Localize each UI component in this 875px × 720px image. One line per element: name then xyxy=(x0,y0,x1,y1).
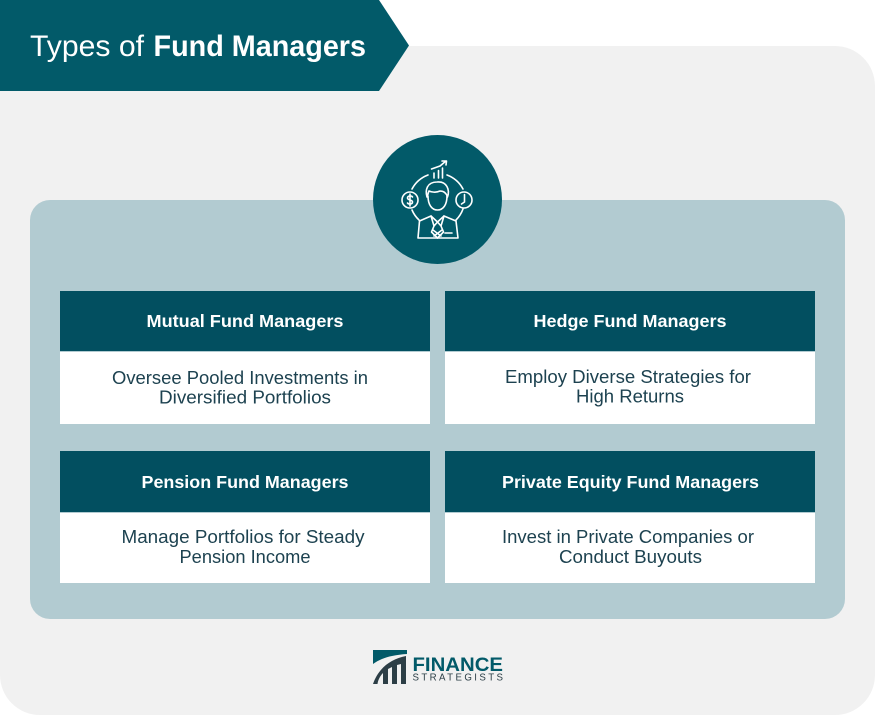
logo wordmark: FINANCE xyxy=(412,654,503,676)
card description: Pension Income xyxy=(180,547,310,567)
card: Pension Fund Managers xyxy=(60,451,430,583)
clock xyxy=(456,192,472,208)
card heading: Hedge Fund Managers xyxy=(534,311,727,331)
card: Private Equity Fund Managers xyxy=(445,451,815,583)
logo mark xyxy=(373,650,407,684)
suit and tie xyxy=(418,216,458,238)
dollar coin xyxy=(402,192,418,208)
logo: Finance Strategists xyxy=(373,650,504,684)
card heading: Mutual Fund Managers xyxy=(146,311,344,331)
growth chart xyxy=(432,161,446,178)
title banner xyxy=(0,0,409,91)
card description: Invest in Private Companies or xyxy=(502,527,754,547)
card description: High Returns xyxy=(576,386,684,406)
title text: Fund Managers xyxy=(154,30,366,63)
icon: fund manager with chart, dollar and clock xyxy=(373,135,502,264)
card heading: Private Equity Fund Managers xyxy=(502,472,759,492)
inner teal panel xyxy=(30,200,845,619)
card description: Diversified Portfolios xyxy=(159,388,331,408)
card description: Oversee Pooled Investments in xyxy=(112,368,368,388)
card description: Manage Portfolios for Steady xyxy=(122,527,364,547)
manager head with hair xyxy=(426,182,448,210)
card heading: Pension Fund Managers xyxy=(142,472,349,492)
title text: Types of xyxy=(30,30,145,63)
card: Hedge Fund Managers xyxy=(445,291,815,424)
orbit arcs xyxy=(412,175,463,220)
card: Mutual Fund Managers xyxy=(60,291,430,424)
card description: Conduct Buyouts xyxy=(559,547,702,567)
logo tagline: STRATEGISTS xyxy=(412,672,504,684)
card description: Employ Diverse Strategies for xyxy=(505,367,751,387)
